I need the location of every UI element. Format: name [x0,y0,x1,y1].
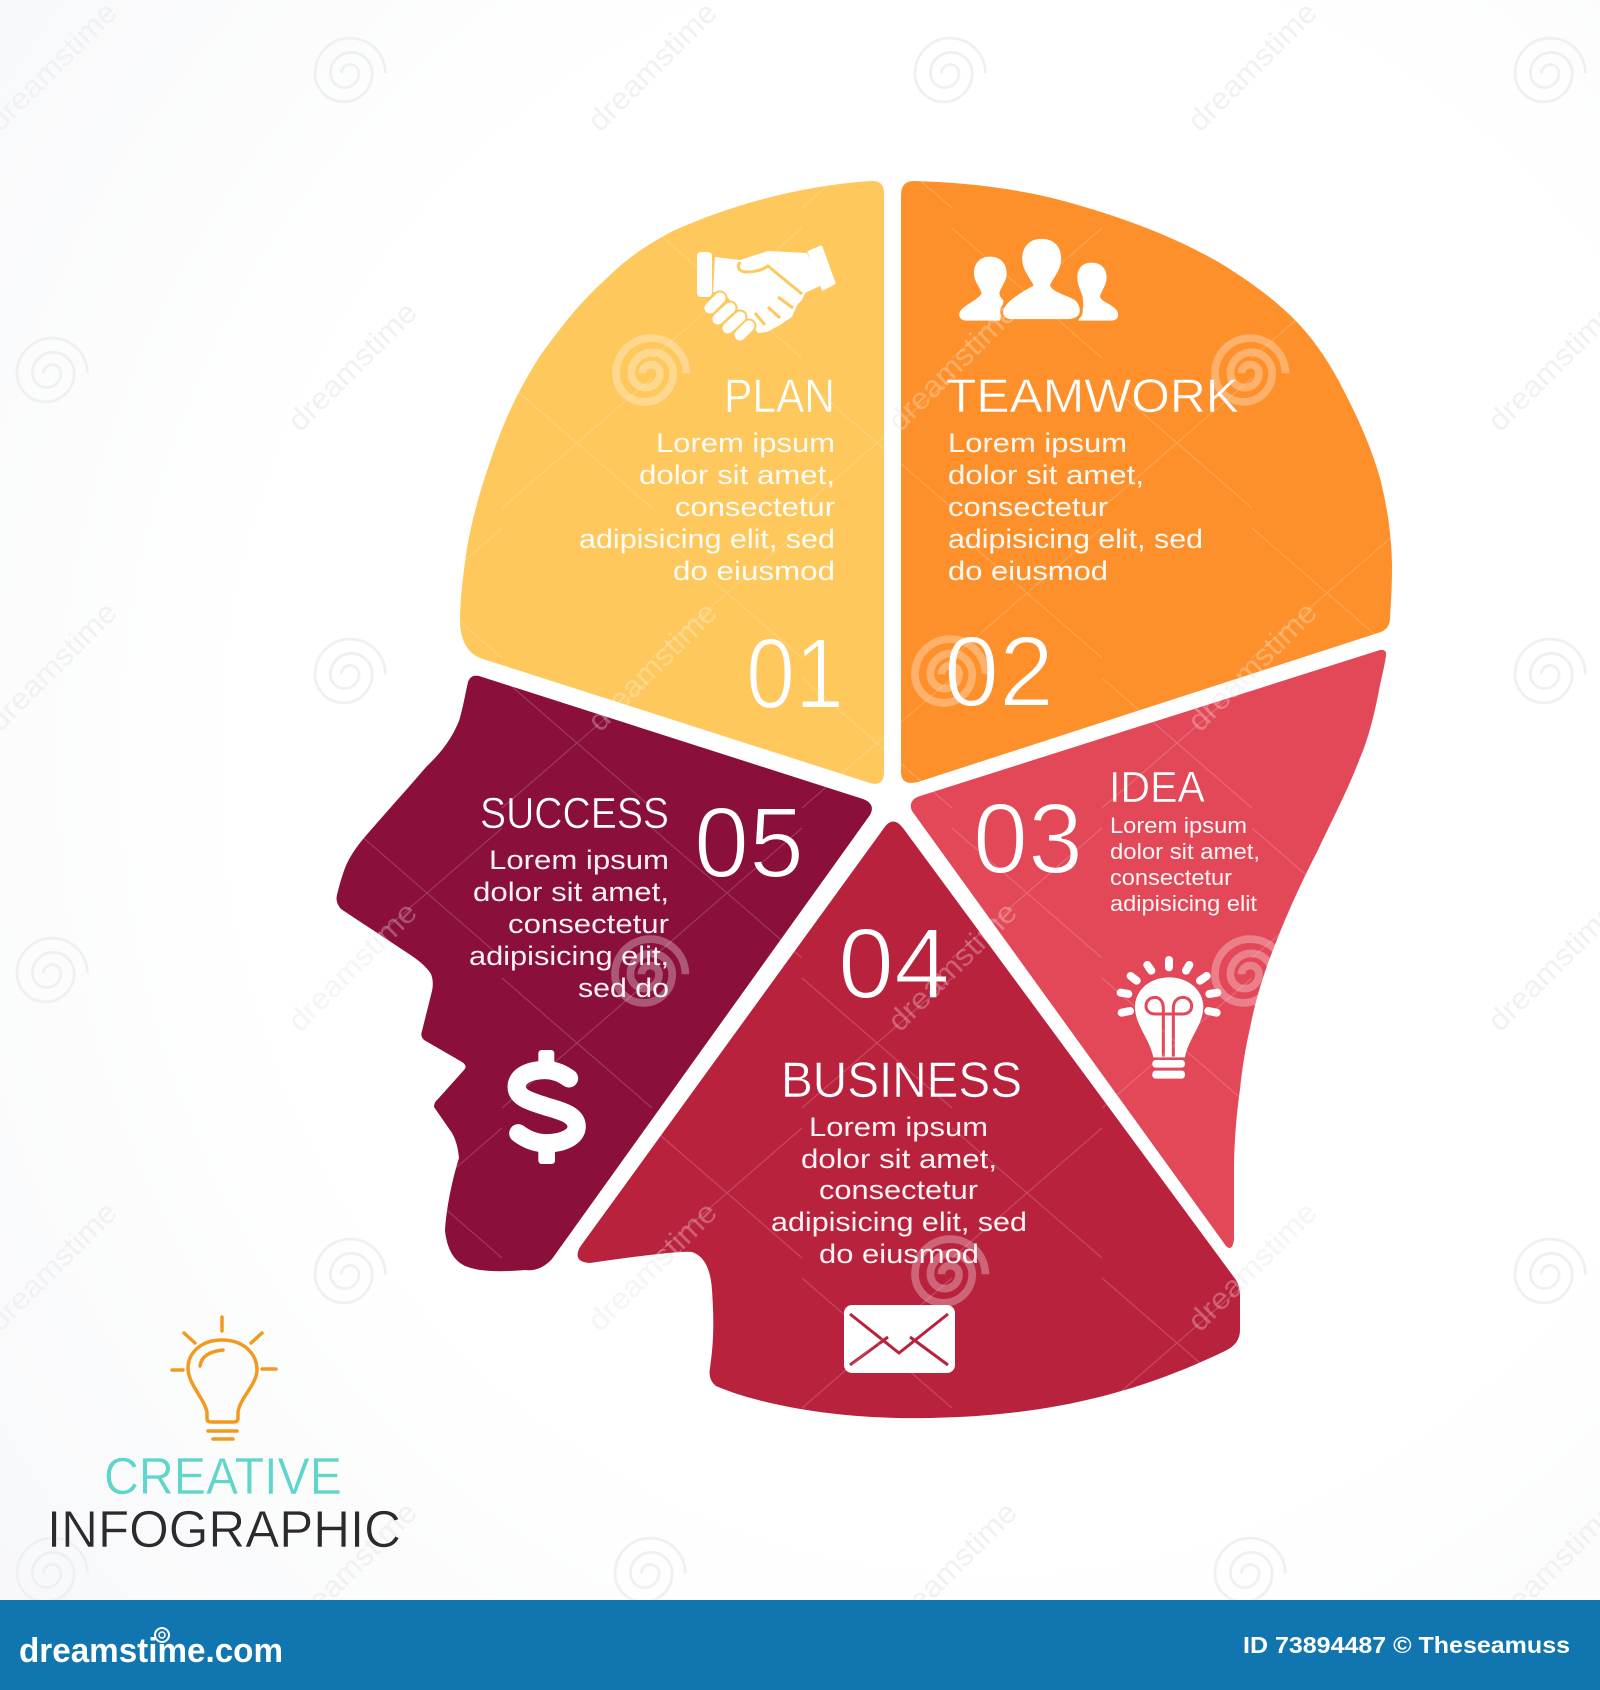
text block: success description: sed do [578,973,669,1003]
text block: plan description: do eiusmod [673,556,835,586]
text: dreamstime [1182,0,1324,138]
text block: business description: consectetur [819,1175,978,1205]
text: dreamstime [1182,1196,1324,1338]
text block: plan description: Lorem ipsum [656,428,835,458]
icon: dollar sign [517,1050,577,1164]
text block: business description [771,1112,1027,1269]
number 02: 02 [944,616,1054,728]
text: dreamstime [582,1196,724,1338]
text: dreamstime [882,296,1024,438]
panel 05: success [336,676,872,1271]
text: dreamstime [282,296,424,438]
footer bar [0,1600,1600,1690]
text: dreamstime [1182,596,1324,738]
heading: plan: PLAN [724,369,835,422]
text block: teamwork description: consectetur [948,492,1108,522]
brand: dreamstime.com: dreamstime.com [19,1632,283,1670]
icon: handshake [697,247,834,335]
heading: idea: IDEA [1109,763,1206,812]
panel 03: idea [911,650,1386,1248]
text block: teamwork description: do eiusmod [948,556,1108,586]
text block: plan description: adipisicing elit, sed [579,524,835,554]
icon: light bulb [1121,960,1217,1079]
text block: plan description: consectetur [675,492,835,522]
image id and credit: ID 73894487 © Theseamuss [1243,1632,1570,1658]
number 05: 05 [694,787,804,899]
text block: business description: do eiusmod [819,1239,979,1269]
text: dreamstime [1182,1196,1324,1338]
icon: outline light bulb [172,1317,276,1439]
logo: creative infographic [47,1317,401,1559]
text: dreamstime [582,0,724,138]
text block: success description: dolor sit amet, [473,877,669,907]
text: dreamstime [282,1496,424,1638]
panel 02: teamwork [901,181,1392,783]
number 04: 04 [838,908,950,1020]
number 01: 01 [746,618,844,730]
text block: idea description [1110,813,1260,916]
number 03: 03 [973,783,1083,895]
heading: business: BUSINESS [781,1052,1022,1108]
text block: success description: consectetur [508,909,669,939]
panel 01: plan [460,181,884,784]
text: dreamstime [882,1496,1024,1638]
text: dreamstime [882,296,1024,438]
text: dreamstime [282,896,424,1038]
text block: success description: Lorem ipsum [489,845,669,875]
text: dreamstime [582,1196,724,1338]
text: dreamstime [582,596,724,738]
panel 04: business [578,822,1240,1418]
heading: creative: CREATIVE [104,1448,342,1506]
text block: plan description [579,428,835,586]
text block: plan description: dolor sit amet, [639,460,835,490]
text block: business description: adipisicing elit, sed [771,1207,1027,1237]
icon: envelope [844,1305,955,1373]
text block: idea description: consectetur [1110,865,1233,890]
text block: business description: Lorem ipsum [809,1112,988,1142]
text block: business description: dolor sit amet, [801,1144,997,1174]
heading: teamwork: TEAMWORK [946,369,1239,422]
text block: teamwork description: dolor sit amet, [948,460,1144,490]
text: dreamstime [1182,596,1324,738]
text block: idea description: Lorem ipsum [1110,813,1247,838]
text: dreamstime [882,896,1024,1038]
text block: success description: adipisicing elit, [469,941,669,971]
text block: teamwork description: Lorem ipsum [948,428,1127,458]
icon: team of people [959,237,1118,321]
text: dreamstime [282,896,424,1038]
heading: infographic: INFOGRAPHIC [47,1501,401,1559]
text block: teamwork description: adipisicing elit, sed [948,524,1203,554]
text block: idea description: adipisicing elit [1110,891,1258,916]
heading: success: SUCCESS [480,789,669,838]
text block: success description [469,845,669,1003]
text block: idea description: dolor sit amet, [1110,839,1260,864]
text block: teamwork description [948,428,1203,586]
